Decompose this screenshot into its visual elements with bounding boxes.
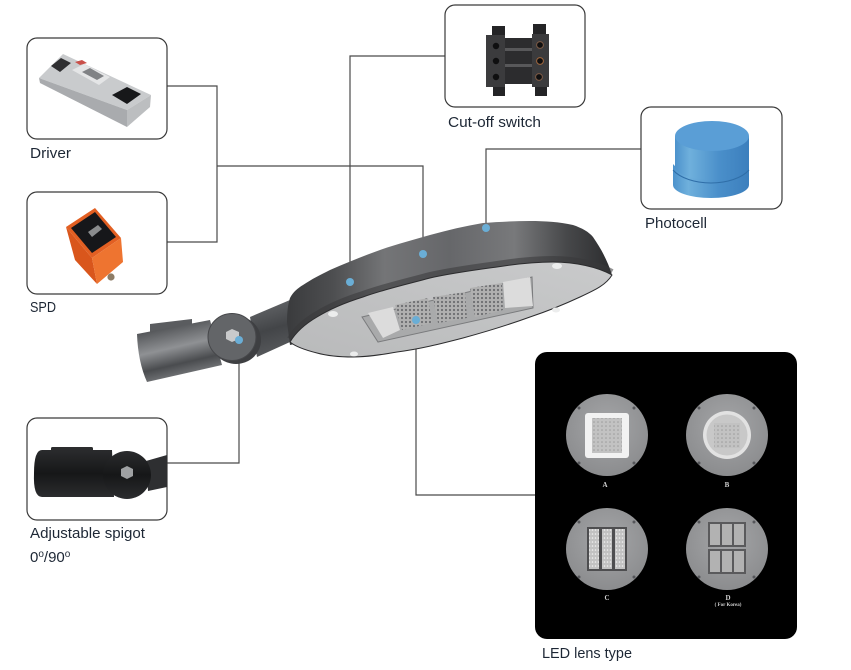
lens A: A bbox=[602, 481, 608, 489]
label: Adjustable spigot bbox=[30, 525, 146, 566]
icon: SPD module bbox=[66, 208, 123, 284]
lower plate bbox=[290, 262, 612, 357]
lens D: D bbox=[725, 594, 731, 602]
label: Photocell: Photocell bbox=[645, 215, 707, 232]
panel: SPD bbox=[27, 192, 167, 316]
spigot joint bbox=[208, 314, 261, 364]
panel: cut-off switch bbox=[445, 5, 585, 131]
label: Adjustable spigot: Adjustable spigot bbox=[30, 525, 146, 542]
panel: photocell bbox=[641, 107, 782, 232]
screw dots bbox=[578, 406, 756, 578]
panel: driver bbox=[27, 38, 167, 162]
housing shadow band bbox=[290, 259, 612, 339]
panel: adjustable spigot bbox=[27, 418, 167, 566]
label: Cut-off switch: Cut-off switch bbox=[448, 114, 541, 131]
lens D bbox=[686, 508, 768, 608]
callout dots bbox=[235, 224, 490, 344]
screw bosses bbox=[328, 263, 562, 356]
label: Adjustable spigot: 0 bbox=[30, 549, 38, 566]
label: Driver: Driver bbox=[30, 145, 71, 162]
label: LED lens type: LED lens type bbox=[542, 645, 632, 662]
icon: spigot photo bbox=[34, 447, 167, 499]
lens C: C bbox=[604, 594, 610, 602]
label: Adjustable spigot: o bbox=[65, 549, 71, 560]
icon: photocell bbox=[673, 121, 749, 198]
icon: cut-off switch bbox=[486, 24, 549, 96]
lens B bbox=[686, 394, 768, 489]
lens D: ( For Korea) bbox=[715, 603, 742, 608]
label: Adjustable spigot: o bbox=[38, 549, 44, 560]
lens B: B bbox=[725, 481, 730, 489]
lens C bbox=[566, 508, 648, 602]
label: Adjustable spigot: /90 bbox=[44, 549, 65, 566]
panel: LED lens type bbox=[535, 352, 797, 639]
housing bbox=[287, 221, 612, 345]
icon: driver unit bbox=[39, 54, 151, 127]
spigot tube bbox=[137, 300, 290, 382]
luminaire bbox=[137, 221, 612, 382]
lens A bbox=[566, 394, 648, 489]
LED module recess bbox=[362, 277, 533, 342]
connector lines bbox=[167, 56, 641, 495]
label: SPD: SPD bbox=[30, 299, 56, 316]
